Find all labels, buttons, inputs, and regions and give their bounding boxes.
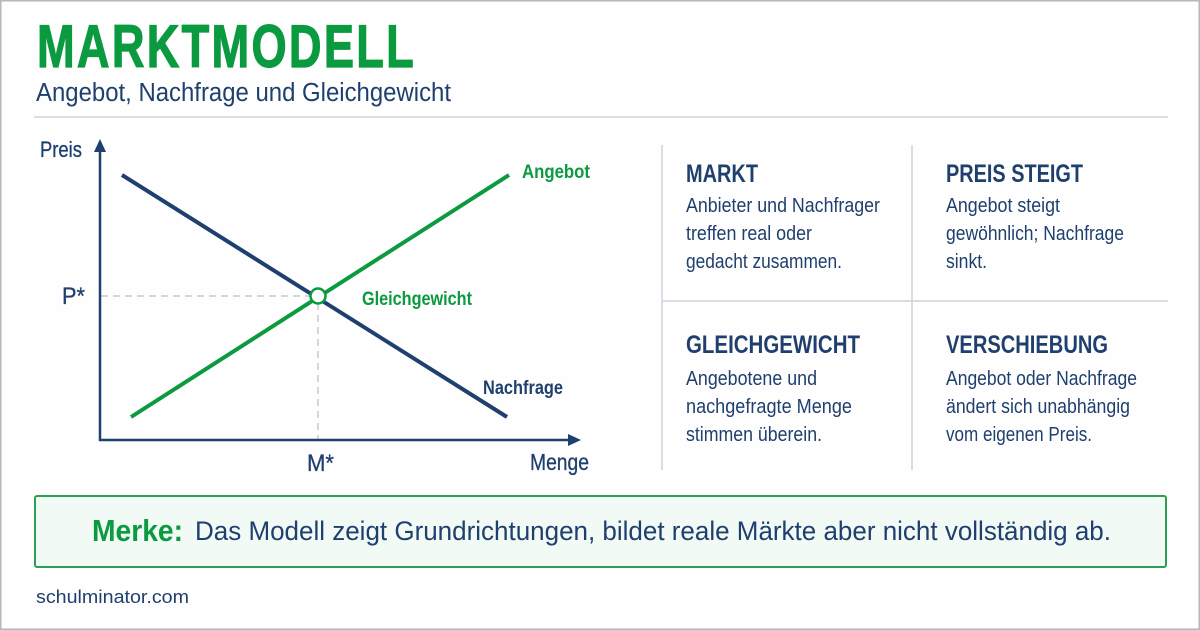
text: Markt: Anbieter und Nachfrager bbox=[686, 195, 880, 217]
text: Markt bbox=[686, 195, 880, 273]
supply curve bbox=[131, 175, 509, 417]
arrow: price axis bbox=[94, 139, 106, 441]
text: Preis steigt: Angebot steigt bbox=[946, 195, 1060, 217]
panel: Verschiebung bbox=[946, 331, 1137, 446]
text: Verschiebung: vom eigenen Preis. bbox=[946, 424, 1092, 446]
arrow: quantity axis bbox=[99, 434, 581, 446]
text: Markt: treffen real oder bbox=[686, 223, 812, 245]
heading: Verschiebung: VERSCHIEBUNG bbox=[946, 331, 1108, 359]
chart: supply and demand bbox=[40, 137, 590, 477]
text: Preis steigt: gewöhnlich; Nachfrage bbox=[946, 223, 1124, 245]
equilibrium point bbox=[310, 288, 326, 304]
demand curve bbox=[122, 175, 507, 417]
text: Verschiebung bbox=[946, 368, 1137, 446]
label: Gleichgewicht: Gleichgewicht bbox=[362, 289, 473, 310]
footer source: schulminator.com bbox=[36, 587, 189, 607]
heading: Preis steigt: PREIS STEIGT bbox=[946, 160, 1083, 188]
text: Preis steigt bbox=[946, 195, 1124, 273]
heading: Markt: MARKT bbox=[686, 160, 758, 188]
panel: Markt bbox=[686, 160, 880, 273]
label: Angebot: Angebot bbox=[522, 161, 590, 183]
text: Gleichgewicht bbox=[686, 368, 852, 446]
text: Markt: gedacht zusammen. bbox=[686, 251, 842, 273]
panel: Preis steigt bbox=[946, 160, 1124, 273]
subtitle: Angebot, Nachfrage und Gleichgewicht bbox=[36, 79, 451, 107]
label: Nachfrage: Nachfrage bbox=[483, 378, 563, 399]
callout: Merke bbox=[35, 496, 1166, 567]
callout: Merke: Merke: bbox=[92, 513, 183, 548]
text: Gleichgewicht: nachgefragte Menge bbox=[686, 396, 852, 418]
title: MARKTMODELL bbox=[37, 13, 416, 80]
label: Menge: Menge bbox=[530, 449, 589, 475]
label: P*: P* bbox=[62, 283, 85, 310]
label: M*: M* bbox=[307, 450, 334, 477]
heading: Gleichgewicht: GLEICHGEWICHT bbox=[686, 331, 860, 359]
text: Gleichgewicht: stimmen überein. bbox=[686, 424, 822, 446]
callout: Merke: Das Modell zeigt Grundrichtungen, bildet reale Märkte aber nicht vollständig ab. bbox=[195, 516, 1111, 546]
dashed guide lines bbox=[101, 296, 318, 440]
text: Verschiebung: ändert sich unabhängig bbox=[946, 396, 1130, 418]
panel: Gleichgewicht bbox=[686, 331, 860, 446]
text: Preis steigt: sinkt. bbox=[946, 251, 987, 273]
text: Verschiebung: Angebot oder Nachfrage bbox=[946, 368, 1137, 390]
text: Gleichgewicht: Angebotene und bbox=[686, 368, 817, 390]
label: Preis: Preis bbox=[40, 137, 82, 162]
